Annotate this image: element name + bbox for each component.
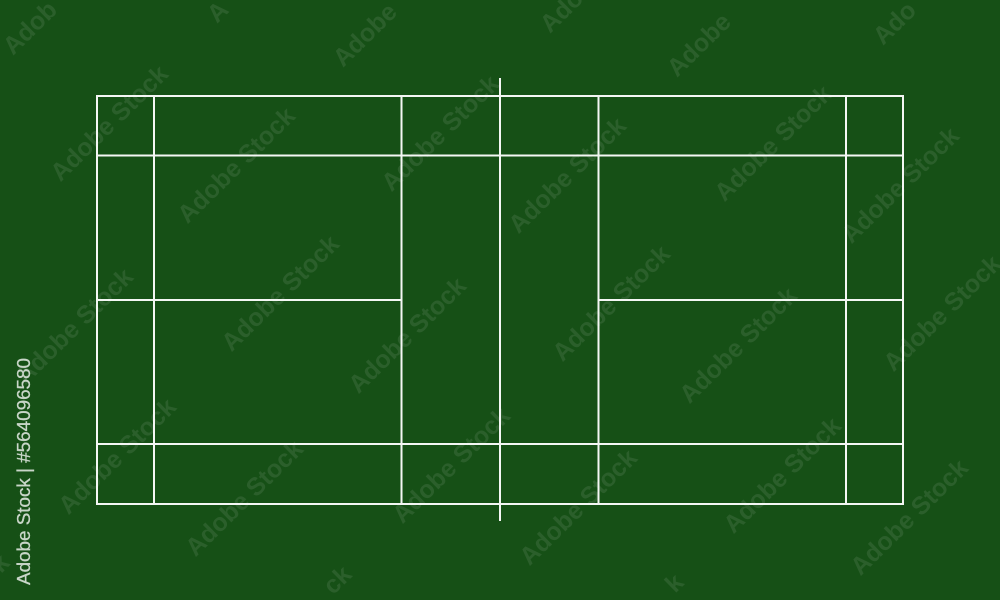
watermarks: Adobe Stock: [547, 240, 676, 367]
watermarks: Adobe Stock: [718, 412, 847, 539]
watermarks: Adobe Stock: [343, 272, 472, 399]
stock id caption: Adobe Stock | #564096580: [13, 358, 34, 585]
watermarks: Adobe: [662, 8, 737, 82]
watermarks: Adobe: [328, 0, 403, 72]
watermarks: Adobe Stock: [216, 230, 345, 357]
watermarks: Adobe Stock: [53, 393, 182, 520]
watermarks: Adobe Stock: [387, 402, 516, 529]
court outer boundary: [97, 96, 903, 504]
watermarks: k: [660, 568, 689, 598]
bottom singles sideline: [97, 443, 903, 445]
right short service line: [598, 96, 600, 504]
right centre line: [598, 299, 903, 301]
watermarks: Adobe Stock: [674, 282, 803, 409]
right doubles sideline: [845, 96, 847, 504]
net line: [499, 78, 501, 521]
court lines: [97, 78, 903, 521]
left centre line: [97, 299, 402, 301]
watermarks: ck: [318, 560, 357, 600]
left short service line: [400, 96, 402, 504]
watermarks: Adobe Stock: [845, 454, 974, 581]
watermarks: Adobe Stock: [376, 70, 505, 197]
watermarks: Adobe Stock: [514, 444, 643, 571]
watermarks: Adobe Stock: [172, 102, 301, 229]
watermarks: Adobe Stock: [503, 112, 632, 239]
watermarks: Adobe Stock: [180, 435, 309, 562]
watermarks: Adobe Stock: [10, 263, 139, 390]
watermarks: Adobe Stock: [709, 80, 838, 207]
watermarks: Adobe Stock: [45, 60, 174, 187]
left doubles sideline: [153, 96, 155, 504]
watermarks: Adobe Stock: [836, 122, 965, 249]
top singles sideline: [97, 154, 903, 156]
